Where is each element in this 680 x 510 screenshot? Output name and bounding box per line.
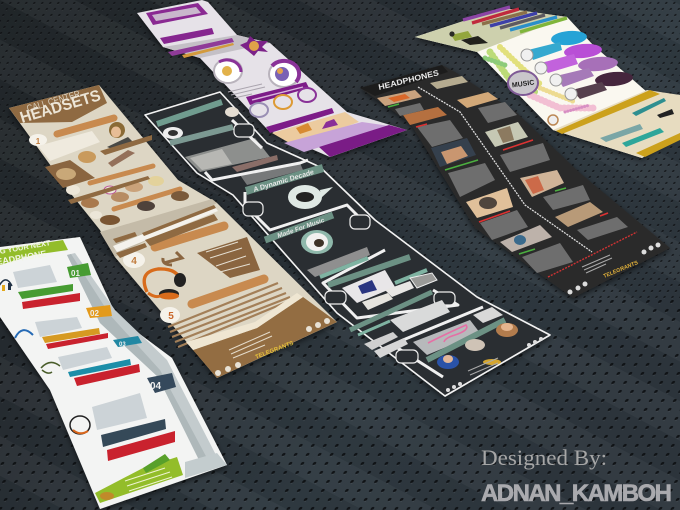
panel: black headphones infographic sheet bbox=[360, 65, 670, 298]
tags: numbered markers: 03 bbox=[119, 342, 126, 348]
icon: people listening bbox=[449, 31, 488, 45]
panel: brown call center headsets sheet bbox=[9, 85, 337, 378]
heading: headphones bbox=[360, 65, 448, 96]
band and photos: thousand songs bbox=[350, 292, 450, 358]
bars: coloured pro and con ribbons bbox=[18, 284, 175, 461]
icon: purple star badge bbox=[240, 36, 268, 56]
footer: logo and icons bbox=[446, 337, 543, 392]
text panels: grey info boxes bbox=[13, 265, 147, 430]
icon: orange headphones bbox=[144, 269, 186, 300]
ribbon: power of music bbox=[160, 28, 214, 44]
photos: television era bbox=[185, 138, 303, 185]
heading: headphones: HEADPHONES bbox=[378, 68, 440, 92]
band: celebrity endorsements bbox=[427, 320, 505, 360]
icon: music badge bbox=[508, 71, 538, 95]
stripes: model list bbox=[168, 283, 294, 347]
timeline: dashed centre line bbox=[418, 87, 592, 252]
tags: numbered markers: 01 bbox=[71, 269, 80, 278]
text block bbox=[228, 84, 265, 98]
ribbon: do more with music bbox=[246, 82, 309, 105]
pipes: white timeline connector bbox=[205, 120, 483, 377]
band: white and brown feature rows at fold bbox=[100, 199, 218, 258]
icon: circular chart left bbox=[214, 59, 242, 83]
photos: music goes mobile bbox=[342, 270, 437, 310]
heading: call center headsets: HEADSETS bbox=[18, 87, 103, 127]
heading ribbon: purple title bbox=[146, 3, 208, 25]
credit: author name: ADNAN_KAMBOH bbox=[481, 480, 672, 507]
ribbon: your body bbox=[266, 108, 334, 133]
band: a dynamic decade: A Dynamic Decade bbox=[253, 169, 315, 194]
pills: section headings 1-5 bbox=[57, 118, 264, 304]
credit: designed by: Designed By: bbox=[481, 445, 607, 470]
footer: green contact band bbox=[95, 454, 183, 503]
icon: QR tile bbox=[473, 307, 503, 323]
icon: portable player medallion bbox=[301, 230, 333, 254]
header band bbox=[157, 102, 222, 124]
icon: music badge: MUSIC bbox=[512, 79, 535, 90]
tags: numbered markers: 04 bbox=[150, 381, 162, 392]
icon: circular chart right bbox=[269, 61, 299, 87]
portraits: celebrities bbox=[437, 323, 518, 369]
nodes: rounded junction icons bbox=[234, 124, 455, 363]
panel: colourful music infographic sheet bbox=[415, 7, 680, 158]
icon: portrait circles bbox=[163, 107, 239, 139]
bottom panel: product comparison bbox=[553, 90, 680, 158]
photos bbox=[377, 76, 603, 252]
panel: white and green headphones guide sheet bbox=[0, 237, 227, 509]
icon: headphones medallion bbox=[288, 185, 333, 209]
heading: choosing your next headphone bbox=[0, 238, 68, 267]
portrait medallions bbox=[45, 150, 189, 225]
subheadings: coloured labels bbox=[388, 104, 608, 254]
footer: brown contact band and logo: TELEGRANTS bbox=[255, 341, 294, 361]
pillar: grey column bbox=[67, 253, 227, 478]
photo and band: walkman era bbox=[307, 247, 410, 285]
brown panel: bullet list bbox=[197, 237, 260, 278]
panel: dark teal timeline sheet bbox=[145, 92, 550, 396]
header band bbox=[415, 8, 567, 52]
chart: spool rows bbox=[521, 29, 634, 100]
icons: headphones bbox=[0, 280, 90, 434]
band: made for music bbox=[265, 215, 333, 240]
ribbons: coloured stripes bbox=[463, 7, 567, 32]
footer: contact and logo bbox=[568, 242, 660, 294]
number badges: 4 bbox=[131, 256, 137, 267]
number badges: 1 bbox=[36, 137, 41, 146]
band: made for music: Made For Music bbox=[277, 217, 325, 240]
photo: fashion statement bbox=[413, 320, 480, 355]
panel: purple music infographic sheet bbox=[137, 0, 407, 157]
chart: percentage rings bbox=[250, 88, 316, 117]
tags: numbered markers: 02 bbox=[90, 309, 99, 318]
text blocks bbox=[395, 102, 628, 273]
strip: brown divider bbox=[68, 176, 150, 204]
divider: red dotted line bbox=[548, 232, 637, 277]
icon: arrow bbox=[163, 252, 182, 265]
number badges: 5 bbox=[168, 311, 174, 322]
number badges bbox=[29, 134, 180, 323]
icon: small logo bbox=[548, 115, 558, 125]
tags: numbered markers bbox=[67, 263, 176, 393]
footer: brown contact band and logo bbox=[186, 293, 337, 378]
heading: call center headsets: CALL CENTER bbox=[26, 89, 82, 115]
icon: operator portrait bbox=[107, 122, 133, 150]
footer: contact and logo: TELEGRANTS bbox=[603, 260, 639, 280]
speckle cloud: coloured notes bbox=[485, 47, 596, 112]
text block bbox=[38, 131, 100, 161]
band: music through television bbox=[170, 127, 233, 143]
